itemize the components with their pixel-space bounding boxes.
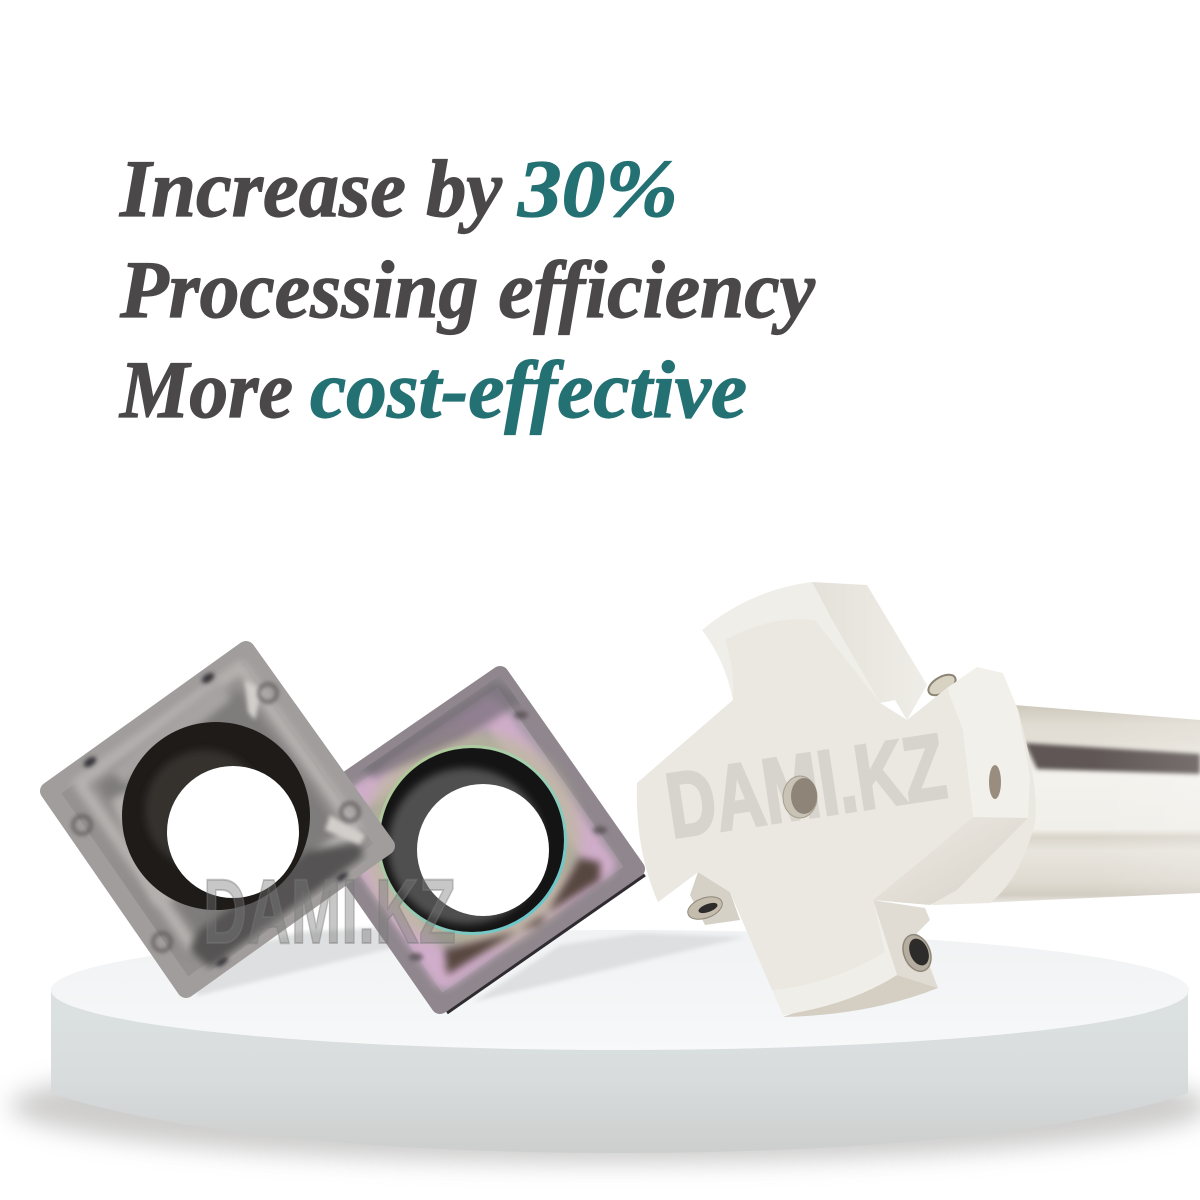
through hole [417,784,549,916]
heading line 1: Increase by 30%: Increase by [119,143,503,234]
collar [947,667,1030,818]
centre hole [783,776,817,818]
podium ground shadow [10,1049,1200,1163]
lower-right clamp block [873,900,938,988]
heading line 1: Increase by 30%: 30% [517,143,678,234]
tool: shank [932,705,1200,905]
podium top surface [51,930,1189,1050]
front face worn tint [637,619,973,990]
bevel under left arm [637,783,698,902]
through hole [167,766,299,898]
dimples [409,711,607,961]
pink iridescent bands [335,710,602,975]
screw: bottom socket screw [898,931,936,975]
insert: grey square insert [49,650,386,989]
shank dark reflection stripe [1025,743,1200,774]
heading line 2: Processing efficiency: Processing efficiency [119,244,816,335]
dimples [73,684,359,951]
front face [637,582,973,1015]
insert: rainbow coated square insert [304,675,645,1013]
iridescent ring [377,745,567,935]
podium side wall [51,990,1188,1153]
raised inner frame [79,667,356,946]
watermark on inserts: DAMI.KZ [203,861,456,963]
back side of upper arm [812,582,927,720]
heading line 1: Increase by 30% [119,143,678,234]
light highlights [245,680,262,720]
shadows cast on podium [195,926,745,1002]
heading line 3: More cost-effective [118,344,747,435]
dark lower-right band [445,858,600,975]
dark bore wall [380,748,564,932]
heading line 3: More cost-effective: More [118,344,293,435]
bulged ring behind collar [932,710,1036,905]
dark lower-right band [190,843,363,968]
heading [118,143,816,435]
screw: left clamp screw [685,872,740,925]
dark lower-right edge [447,875,645,1013]
dark bore wall [122,722,310,910]
screw: top clamp screw [925,671,959,699]
heading line 3: More cost-effective: cost-effective [310,344,747,435]
platform: round white podium [10,926,1200,1163]
underside bevel [873,817,1028,905]
tool: cutter head [637,582,1036,1017]
collar side hole [989,765,1001,799]
rim under lower arm [783,975,938,1017]
tool watermark: DAMI.KZ [660,716,952,858]
